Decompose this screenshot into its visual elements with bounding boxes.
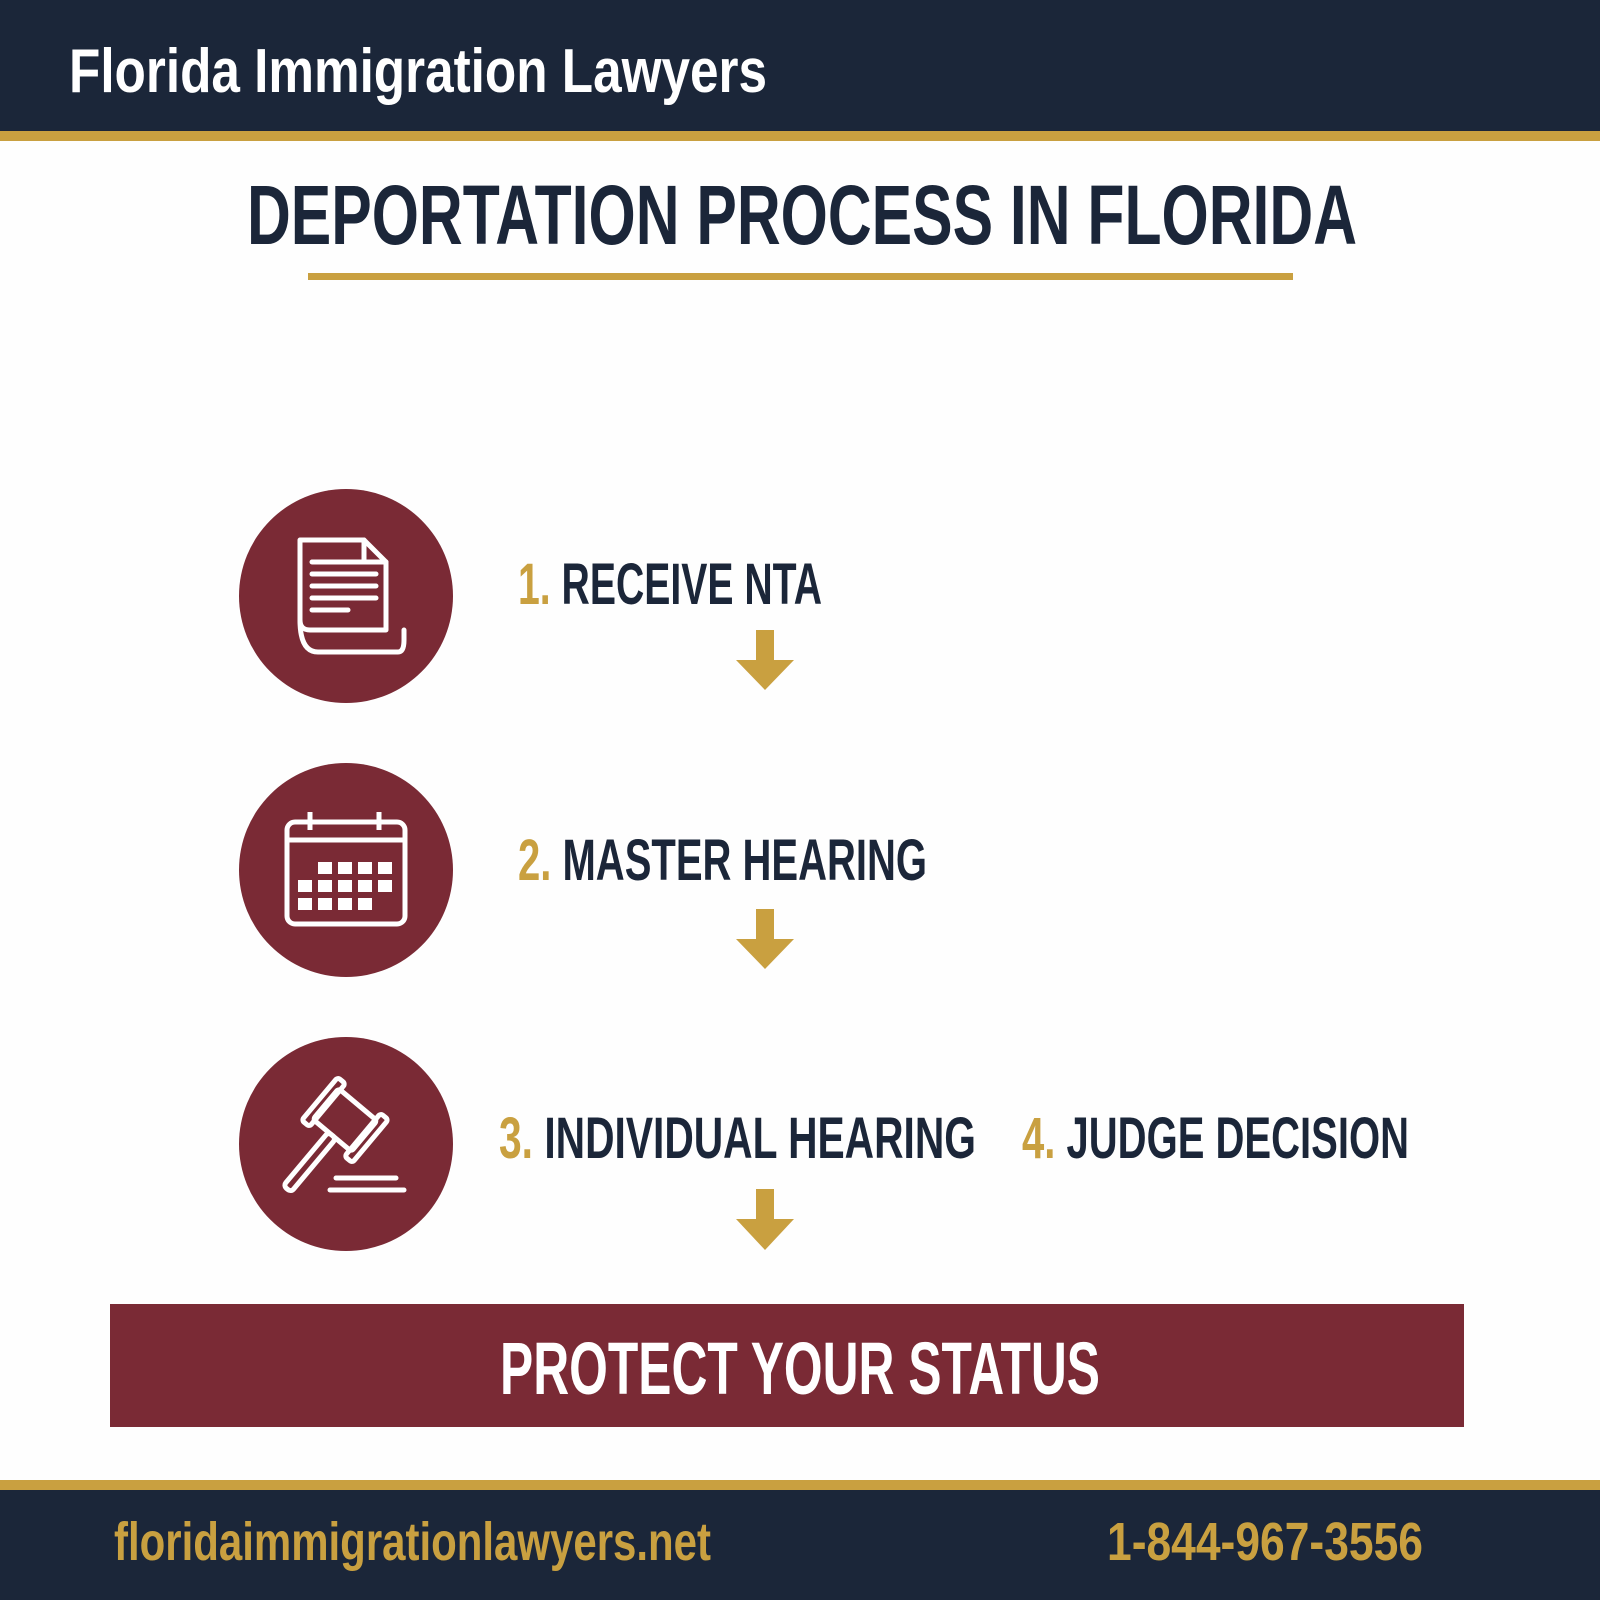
icon: document — [239, 489, 453, 703]
icon: gavel — [239, 1037, 453, 1251]
step 4 label: 4. JUDGE DECISION — [1022, 1106, 1409, 1171]
step 2 — [239, 763, 927, 977]
step 2 label: 2. MASTER HEARING — [518, 828, 927, 893]
banner: protect your status: PROTECT YOUR STATUS — [500, 1327, 1100, 1410]
header bar — [0, 0, 1600, 141]
banner: protect your status — [110, 1304, 1464, 1427]
arrow 1 — [736, 630, 794, 690]
step 1 — [239, 489, 822, 703]
step 3 — [239, 1037, 1409, 1251]
footer phone: 1-844-967-3556 — [1107, 1512, 1423, 1572]
arrow 3 — [736, 1189, 794, 1250]
header brand text: Florida Immigration Lawyers — [69, 37, 767, 106]
step 1 label: 1. RECEIVE NTA — [518, 552, 822, 617]
arrow 2 — [736, 909, 794, 969]
footer — [0, 1480, 1600, 1600]
footer url: floridaimmigrationlawyers.net — [114, 1512, 711, 1572]
step 3 label: 3. INDIVIDUAL HEARING — [499, 1106, 976, 1171]
icon: calendar — [239, 763, 453, 977]
